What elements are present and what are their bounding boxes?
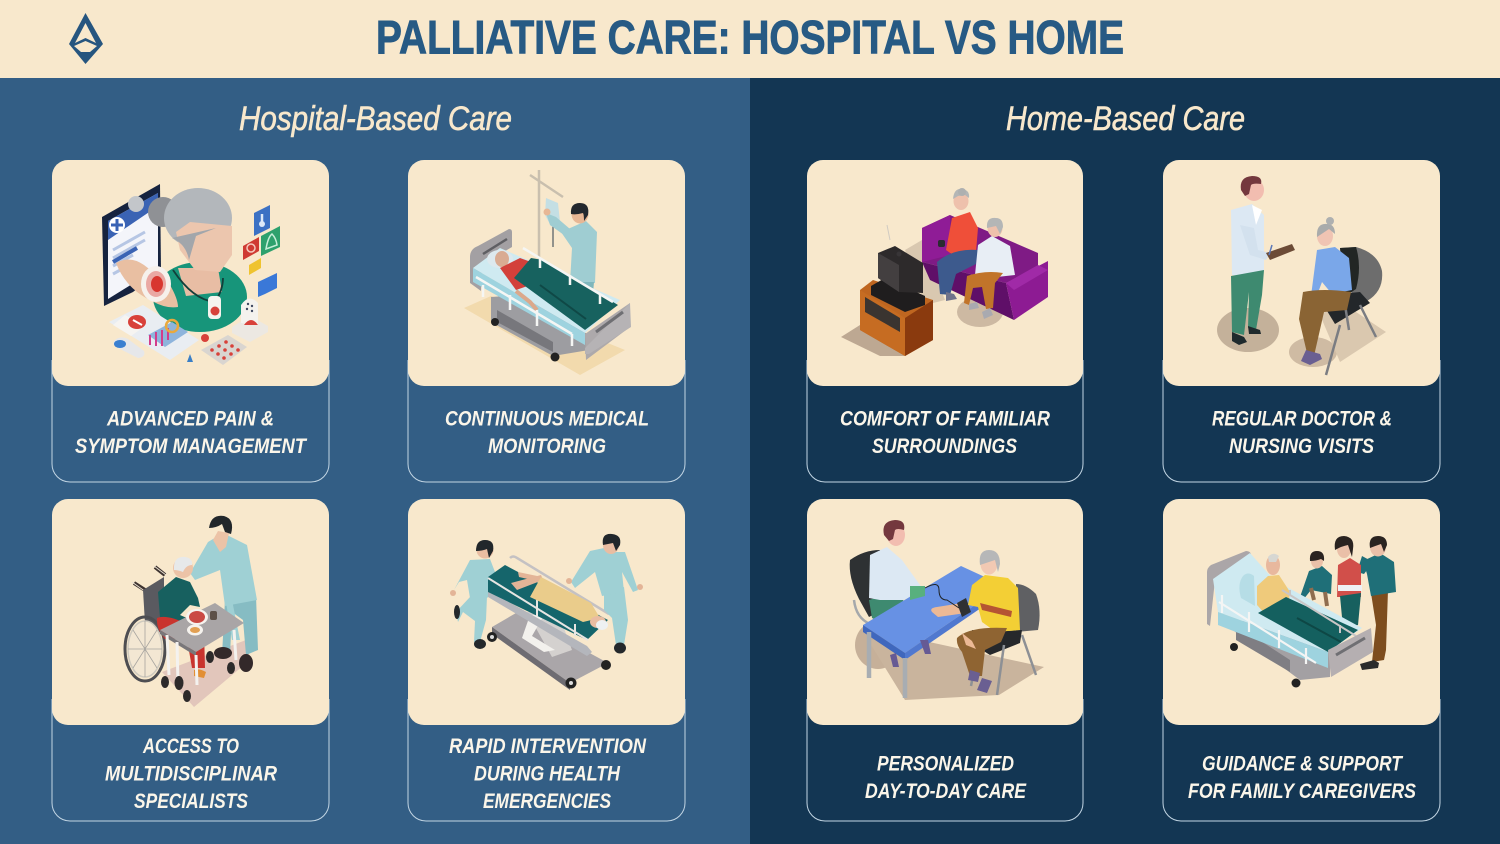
caption: SPECIALISTS xyxy=(134,789,249,813)
card: guidance and support for family caregivers xyxy=(1163,499,1440,821)
caption: SYMPTOM MANAGEMENT xyxy=(75,434,308,458)
caption: FOR FAMILY CAREGIVERS xyxy=(1188,779,1417,803)
caption: NURSING VISITS xyxy=(1229,434,1375,458)
card: personalized day-to-day care xyxy=(807,499,1083,821)
heading: home-based care: Home-Based Care xyxy=(1006,100,1245,138)
caption: ACCESS TO xyxy=(142,734,239,758)
caption xyxy=(1188,752,1417,803)
caption: CONTINUOUS MEDICAL xyxy=(445,406,649,430)
caption xyxy=(75,406,308,458)
title: PALLIATIVE CARE: HOSPITAL VS HOME xyxy=(376,10,1124,64)
card: regular doctor and nursing visits xyxy=(1163,160,1440,482)
caption xyxy=(1212,406,1392,458)
header band xyxy=(0,0,1500,78)
panel: hospital-based care xyxy=(0,78,750,844)
caption: COMFORT OF FAMILIAR xyxy=(840,406,1050,430)
caption: MULTIDISCIPLINAR xyxy=(105,762,277,786)
caption xyxy=(449,734,646,813)
caption: PERSONALIZED xyxy=(877,752,1014,776)
illustration: blood pressure check at table xyxy=(850,520,1044,700)
caption: DAY-TO-DAY CARE xyxy=(865,779,1027,803)
caption: RAPID INTERVENTION xyxy=(449,734,646,758)
caption: ADVANCED PAIN & xyxy=(106,406,274,430)
caption: SURROUNDINGS xyxy=(872,434,1018,458)
caption: REGULAR DOCTOR & xyxy=(1212,406,1392,430)
caption xyxy=(840,406,1050,458)
illustration: family around patient bed xyxy=(1207,536,1396,688)
caption xyxy=(445,406,649,458)
caption xyxy=(105,734,277,813)
illustration: nurse with patient in wheelchair xyxy=(125,516,258,707)
caption: EMERGENCIES xyxy=(483,789,612,813)
card: continuous medical monitoring xyxy=(408,160,685,482)
caption: DURING HEALTH xyxy=(474,762,620,786)
panel: home-based care xyxy=(750,78,1500,844)
card: advanced pain and symptom management xyxy=(52,160,329,482)
illustration: staff moving a stretcher xyxy=(450,534,643,690)
illustration: patient with alert button xyxy=(102,184,280,365)
caption xyxy=(865,752,1027,803)
illustration: patient in bed with nurse xyxy=(464,170,631,375)
caption: GUIDANCE & SUPPORT xyxy=(1202,752,1404,776)
card: comfort of familiar surroundings xyxy=(807,160,1083,482)
logo icon xyxy=(69,13,103,64)
caption: MONITORING xyxy=(488,434,606,458)
illustration: couple watching television xyxy=(841,188,1048,356)
card: rapid intervention xyxy=(408,499,685,821)
heading: hospital-based care: Hospital-Based Care xyxy=(239,100,512,138)
card: access to multidisciplinary specialists xyxy=(52,499,329,821)
illustration: doctor visiting elderly patient xyxy=(1217,176,1386,375)
